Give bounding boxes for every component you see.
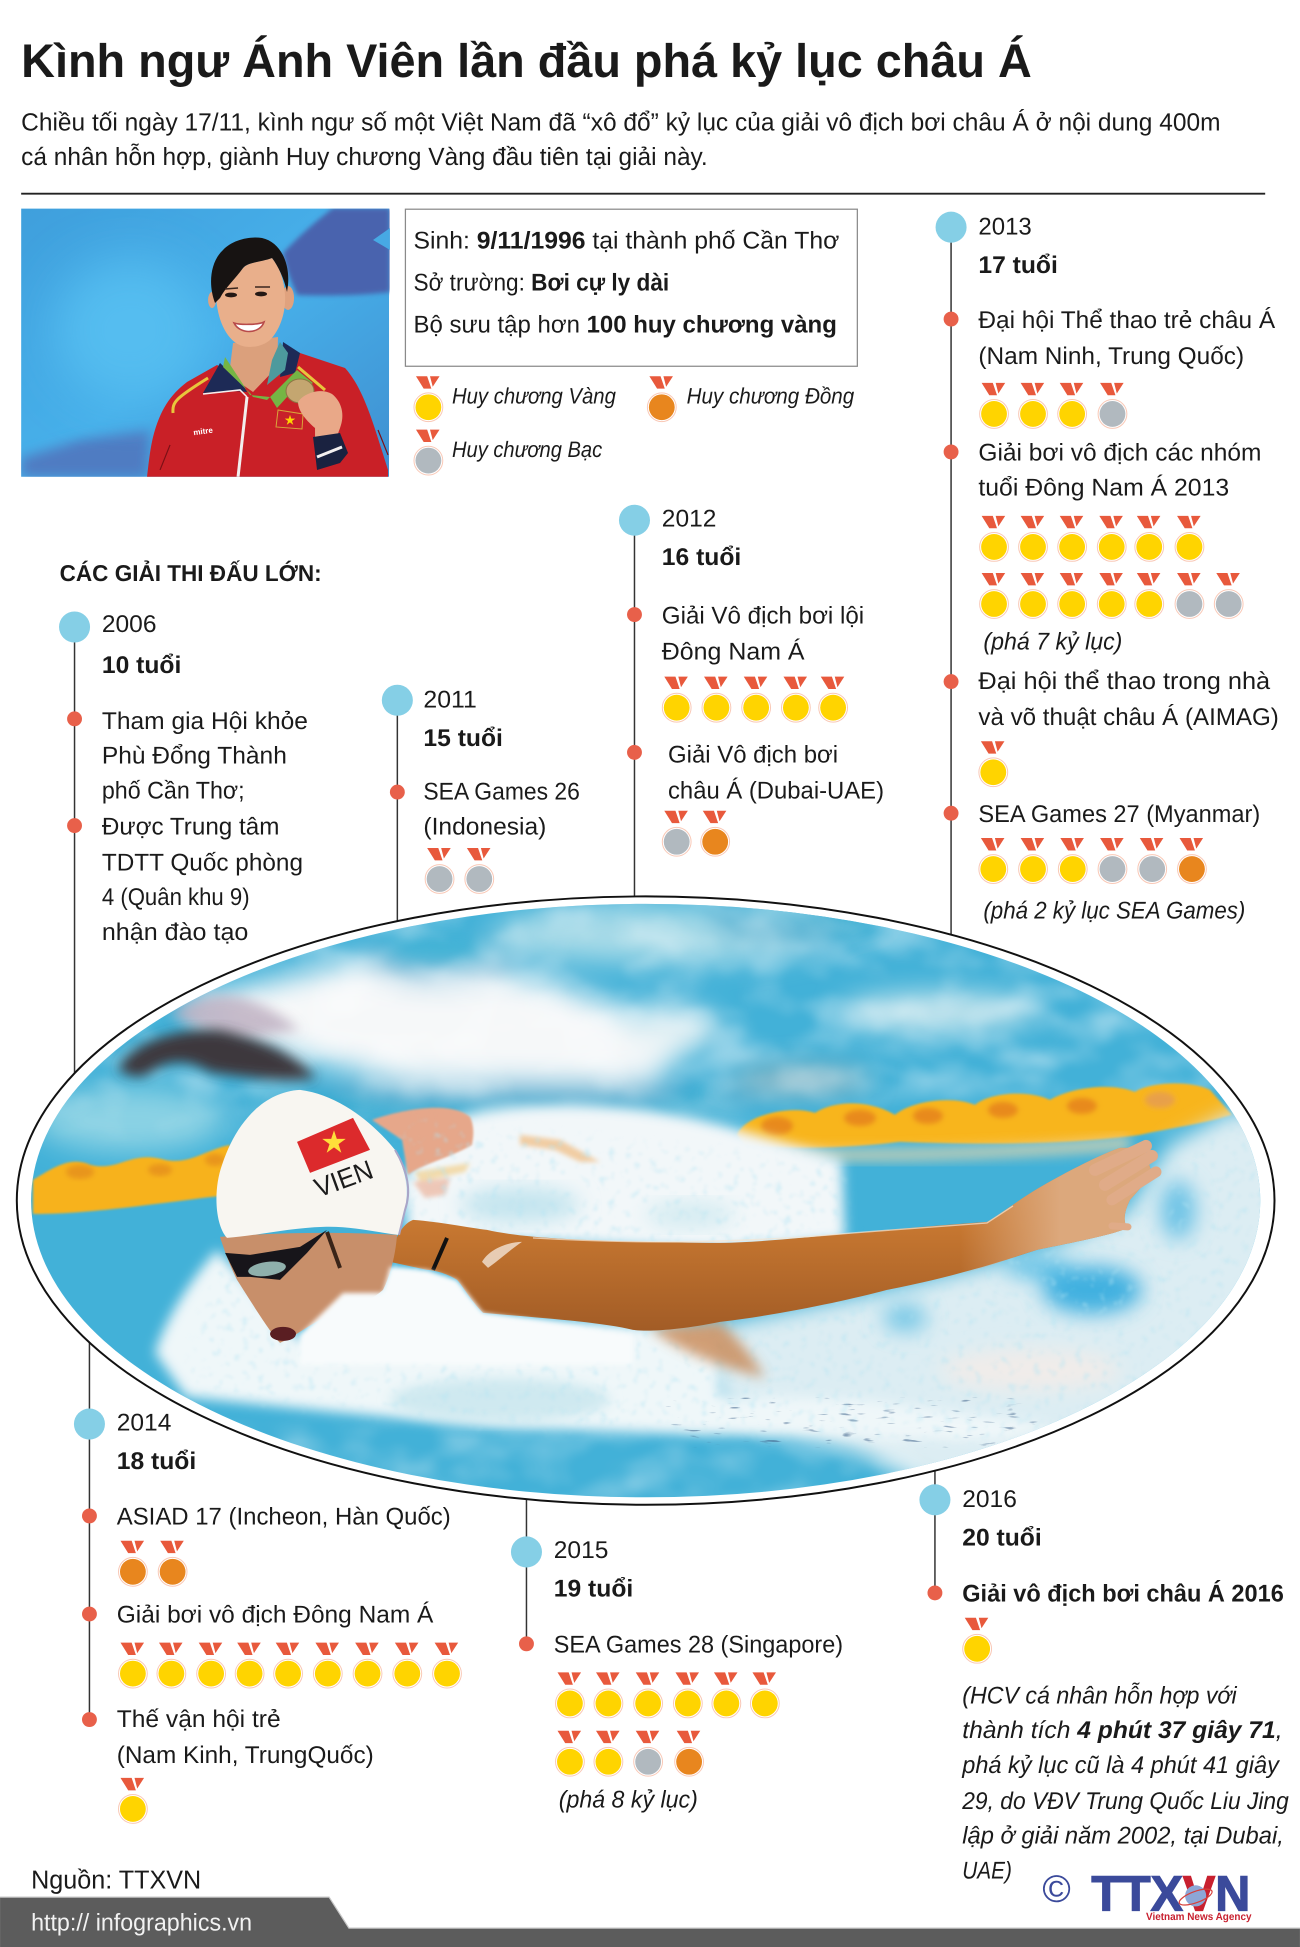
timeline 2013: Giải bơi vô địch các nhóm [978,440,1261,467]
timeline 2015: 2015 [554,1537,609,1564]
timeline 2015: (phá 8 kỷ lục) [559,1787,698,1814]
timeline 2014: 18 tuổi [117,1448,196,1475]
intro text: Chiều tối ngày 17/11, kình ngư số một Việt Nam đã “xô đổ” kỷ lục của giải vô địch bơi châu Á ở nội dung 400m [21,108,1220,137]
intro text [21,108,1220,171]
timeline 2015 [511,1490,843,1814]
timeline 2013: 17 tuổi [978,252,1058,279]
timeline 2013: Đại hội thể thao trong nhà [978,668,1270,695]
timeline 2013 [936,212,1279,944]
timeline 2012: Đông Nam Á [662,638,805,665]
timeline 2011: 2011 [423,687,477,714]
info box [405,209,857,366]
swimmer face [220,1233,397,1343]
timeline 2013: (Nam Ninh, Trung Quốc) [978,343,1244,370]
source: Nguồn: TTXVN [31,1866,201,1895]
timeline 2006: 2006 [102,611,156,638]
logo: TTXVN: © [1042,1867,1071,1911]
timeline 2006: Tham gia Hội khỏe [102,708,308,735]
timeline 2014 [74,1335,461,1823]
timeline 2013: (phá 2 kỷ lục SEA Games) [983,898,1245,925]
medal legend: Huy chương Bạc [452,437,602,462]
timeline 2012: châu Á (Dubai-UAE) [668,777,884,805]
rear body [650,1322,765,1378]
dark swimmer behind [170,996,300,1040]
timeline 2012 [619,505,884,906]
right light water [700,1100,1260,1476]
medal legend [414,376,854,475]
timeline 2013: (phá 7 kỷ lục) [983,628,1122,656]
timeline 2006: 10 tuổi [102,652,181,679]
info box: Sinh: 9/11/1996 tại thành phố Cần Thơ [413,227,840,255]
portrait photo: ★ [285,414,296,427]
timeline 2011: 15 tuổi [423,725,503,752]
portrait photo [21,208,390,477]
rear hand [372,1108,473,1175]
timeline 2006: Phù Đổng Thành [102,742,287,770]
timeline 2016: phá kỷ lục cũ là 4 phút 41 giây [961,1752,1280,1779]
timeline 2013: 2013 [978,214,1032,241]
neck [230,337,278,392]
timeline 2006 [59,611,308,1080]
intro text: cá nhân hỗn hợp, giành Huy chương Vàng đầu tiên tại giải này. [21,143,708,171]
timeline 2016: (HCV cá nhân hỗn hợp với [962,1682,1237,1710]
timeline 2006: phố Cần Thơ; [102,777,245,805]
swimmer photo ellipse [0,890,1300,1510]
medal legend: Huy chương Vàng [452,384,616,408]
lane rope right [737,1083,1232,1148]
timeline 2006: nhận đào tạo [102,919,249,946]
timeline 2015: SEA Games 28 (Singapore) [554,1631,843,1659]
timeline 2016: 2016 [962,1486,1017,1513]
info box: Bộ sưu tập hơn 100 huy chương vàng [413,312,837,339]
timeline 2012: 16 tuổi [662,544,741,571]
swimmer photo ellipse: VIEN [310,1155,377,1203]
timeline 2006: 4 (Quân khu 9) [102,884,250,911]
water bottom [276,1424,922,1497]
timeline 2013: và võ thuật châu Á (AIMAG) [978,704,1279,731]
timeline 2016: lập ở giải năm 2002, tại Dubai, [962,1823,1284,1850]
medal legend: Huy chương Đồng [687,384,854,408]
timeline 2016 [919,1465,1289,1885]
portrait photo: mitre [193,426,214,437]
timeline 2012: Giải Vô địch bơi [668,741,838,769]
timeline 2014: Giải bơi vô địch Đông Nam Á [117,1602,433,1629]
lane rope left [33,1145,230,1214]
info box: Sở trường: Bơi cự ly dài [413,269,669,297]
timeline 2011: SEA Games 26 [423,778,580,806]
timeline 2013: Đại hội Thể thao trẻ châu Á [978,307,1275,334]
head [284,286,294,310]
splash above arm [400,1105,845,1250]
timeline 2013: tuổi Đông Nam Á 2013 [978,474,1229,502]
jacket [147,353,388,477]
timeline 2006: TDTT Quốc phòng [102,849,303,877]
upper water [35,902,1040,1152]
timeline 2013: SEA Games 27 (Myanmar) [978,801,1260,828]
swimmer photo ellipse: ★ [322,1129,347,1157]
footer band: http:// infographics.vn [31,1910,252,1937]
swim cap [216,1090,407,1238]
section heading: CÁC GIẢI THI ĐẤU LỚN: [60,560,322,586]
timeline 2016: 20 tuổi [962,1525,1042,1552]
timeline 2016: thành tích 4 phút 37 giây 71, [962,1717,1283,1744]
timeline 2011 [382,685,580,931]
timeline 2014: Thế vận hội trẻ [117,1706,281,1733]
swimmer arm [390,1148,1152,1331]
timeline 2016: UAE) [962,1857,1012,1885]
logo: TTXVN: Vietnam News Agency [1146,1910,1252,1923]
timeline 2014: 2014 [117,1409,172,1436]
logo: TTXVN: TTXVN [1091,1867,1250,1922]
timeline 2011: (Indonesia) [423,813,546,841]
timeline 2012: Giải Vô địch bơi lội [662,602,864,629]
timeline 2012: 2012 [662,505,716,533]
timeline 2006: Được Trung tâm [102,813,279,841]
timeline 2016: Giải vô địch bơi châu Á 2016 [962,1579,1284,1608]
timeline 2016: 29, do VĐV Trung Quốc Liu Jing [961,1788,1289,1815]
timeline 2014: (Nam Kinh, TrungQuốc) [117,1742,374,1769]
timeline 2014: ASIAD 17 (Incheon, Hàn Quốc) [117,1504,451,1531]
footer band [0,1897,1300,1947]
title: Kình ngư Ánh Viên lần đầu phá kỷ lục châu Á [21,35,1032,88]
lower splash [155,1250,1053,1440]
timeline 2015: 19 tuổi [554,1576,633,1603]
